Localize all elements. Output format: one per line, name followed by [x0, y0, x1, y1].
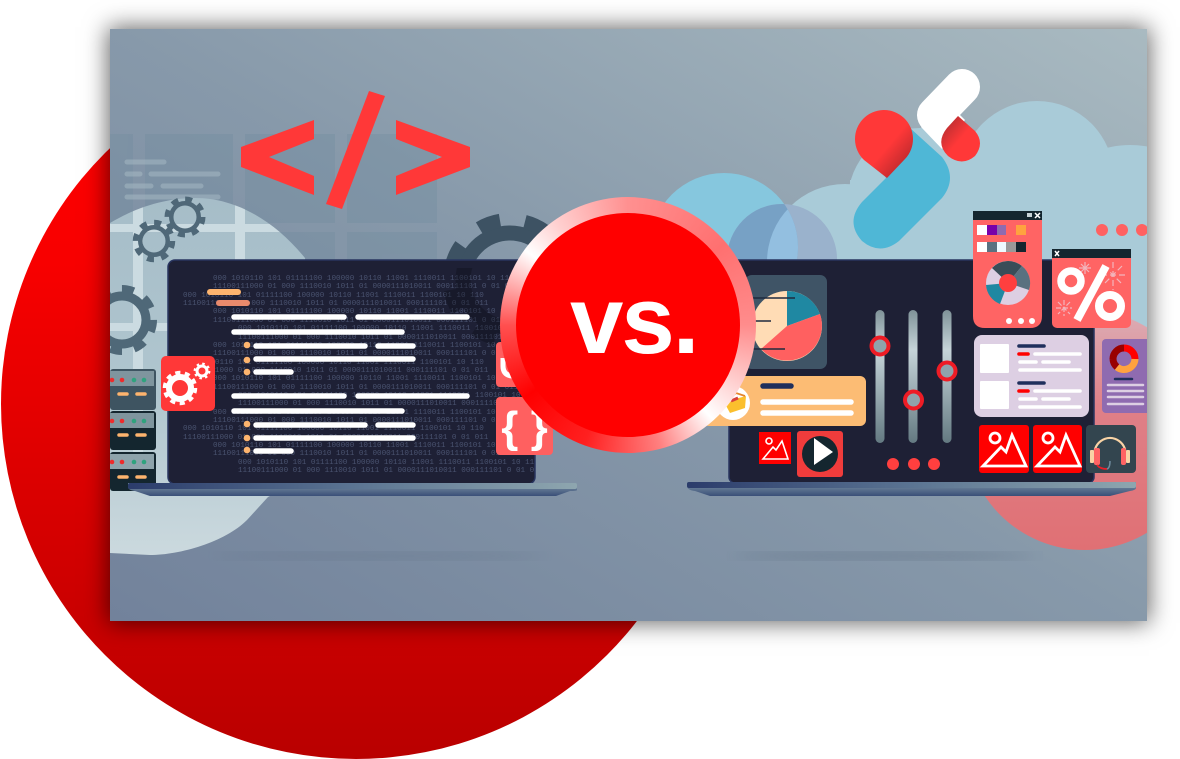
faded window grid background: [310, 134, 437, 216]
binary code text: 11100111000 01 000 1110010 1011 01 0000111010011 000111101 0 01 011: [213, 283, 519, 291]
binary code text: 11100111000 01 000 1110010 1011 01 0000111010011 000111101 0 01 011: [213, 317, 519, 325]
VS badge: [500, 197, 756, 453]
binary code text: 000 1010110 101 01111100 100000 10110 11001 1110011 1100101 10 110: [238, 392, 539, 400]
faded text lines: [127, 162, 218, 197]
binary code text: 11100111000 01 000 1110010 1011 01 0000111010011 000111101 0 01 011: [183, 434, 489, 442]
gear overlay on screen: [444, 268, 500, 345]
icon: small gear lower: [136, 222, 172, 260]
logo white stroke: [921, 87, 965, 149]
icon: image tile two: [1033, 425, 1082, 473]
background blue circle: [665, 173, 784, 246]
badge inner red disc: [516, 213, 740, 437]
icon: large gear left: [110, 285, 157, 355]
red background circle: [1, 49, 711, 759]
icon: code brackets symbol: [241, 91, 470, 209]
binary code text: 11100111000 01 000 1110010 1011 01 0000111010011 000111101 0 01 011: [213, 417, 519, 425]
orange code lines: [210, 292, 247, 303]
icon: curly braces square: { }: [501, 403, 548, 452]
binary code text: 000 1010110 101 01111100 100000 10110 11001 1110011 1100101 10 110: [213, 442, 514, 450]
server rack: [110, 369, 156, 491]
icon: headset: [1086, 425, 1136, 473]
left background blob: [110, 198, 305, 555]
binary code text: 000 1010110 101 01111100 100000 10110 11001 1110011 1100101 10 110: [183, 292, 484, 300]
red dots under sliders: [887, 458, 940, 470]
logo: [854, 87, 980, 248]
binary code text: 11100111000 01 000 1110010 1011 01 0000111010011 000111101 0 01 011: [183, 367, 489, 375]
panel: illustration background: [110, 29, 1147, 621]
ground shadow left: [215, 552, 545, 560]
binary code text: 000 1010110 101 01111100 100000 10110 11001 1110011 1100101 10 110: [213, 342, 514, 350]
binary code text: 000 1010110 101 01111100 100000 10110 11001 1110011 1100101 10 110: [213, 409, 514, 417]
laptop base left: [128, 483, 577, 496]
cloud shape: [792, 101, 1147, 327]
binary code text: 11100111000 01 000 1110010 1011 01 0000111010011 000111101 0 01 011: [213, 350, 519, 358]
orange card: [703, 376, 866, 426]
binary code text: 11100111000 01 000 1110010 1011 01 0000111010011 000111101 0 01 011: [238, 467, 544, 475]
panel: colour palette window: [973, 211, 1042, 328]
binary code text: 000 1010110 101 01111100 100000 10110 11001 1110011 1100101 10 110: [183, 359, 484, 367]
ground shadow right: [784, 551, 996, 561]
binary code text: 11100111000 01 000 1110010 1011 01 0000111010011 000111101 0 01 011: [213, 384, 519, 392]
icon: large dark gear: [446, 214, 548, 260]
left laptop: [128, 260, 577, 496]
laptop base right: [687, 482, 1136, 496]
panel: percent window: [1052, 249, 1131, 328]
binary code text: 000 1010110 101 01111100 100000 10110 11001 1110011 1100101 10 110: [238, 459, 539, 467]
donut mini chart: [1113, 348, 1135, 370]
illustration scene: [110, 69, 1147, 561]
binary code text: [183, 275, 544, 475]
panel: pie chart: [745, 275, 827, 369]
laptop screen right: [729, 260, 1094, 483]
donut chart: [986, 261, 1030, 305]
icon: small gear top: [167, 199, 203, 235]
pink blob right: [984, 319, 1147, 550]
white code lines: [234, 317, 467, 451]
icon: upper code square: [496, 342, 516, 387]
panel: lavender list card: [974, 335, 1089, 417]
icon: curly braces square: [496, 397, 553, 455]
icon: shopping basket: [724, 393, 746, 413]
icon: red gears square: [161, 356, 215, 411]
binary code text: 000 1010110 101 01111100 100000 10110 11001 1110011 1100101 10 110: [183, 425, 484, 433]
binary code text: 000 1010110 101 01111100 100000 10110 11001 1110011 1100101 10 110: [238, 325, 539, 333]
binary code text: 11100111000 01 000 1110010 1011 01 0000111010011 000111101 0 01 011: [183, 300, 489, 308]
binary code text: 000 1010110 101 01111100 100000 10110 11001 1110011 1100101 10 110: [213, 375, 514, 383]
VS text: vs.: [570, 267, 697, 374]
icon: play button: [797, 431, 843, 477]
laptop screen left: [168, 260, 535, 484]
binary code text: 11100111000 01 000 1110010 1011 01 0000111010011 000111101 0 01 011: [238, 400, 544, 408]
code bullets: [244, 342, 250, 453]
icon: small image: [759, 432, 791, 464]
sliders: [872, 310, 956, 443]
logo small red drop: [941, 116, 980, 162]
logo red drop: [855, 110, 913, 178]
red dots top right: [1096, 224, 1148, 236]
binary code text: 000 1010110 101 01111100 100000 10110 11001 1110011 1100101 10 110: [213, 275, 514, 283]
right laptop: [687, 260, 1136, 496]
icon: image tile one: [979, 425, 1029, 473]
panel: purple report card: [1102, 339, 1152, 413]
binary code text: 11100111000 01 000 1110010 1011 01 0000111010011 000111101 0 01 011: [238, 334, 544, 342]
overlapping purple circle: [728, 204, 837, 260]
pie chart: [752, 291, 822, 361]
binary code text: 000 1010110 101 01111100 100000 10110 11001 1110011 1100101 10 110: [213, 308, 514, 316]
binary code text: 11100111000 01 000 1110010 1011 01 0000111010011 000111101 0 01 011: [213, 450, 519, 458]
logo blue stroke: [854, 128, 950, 248]
